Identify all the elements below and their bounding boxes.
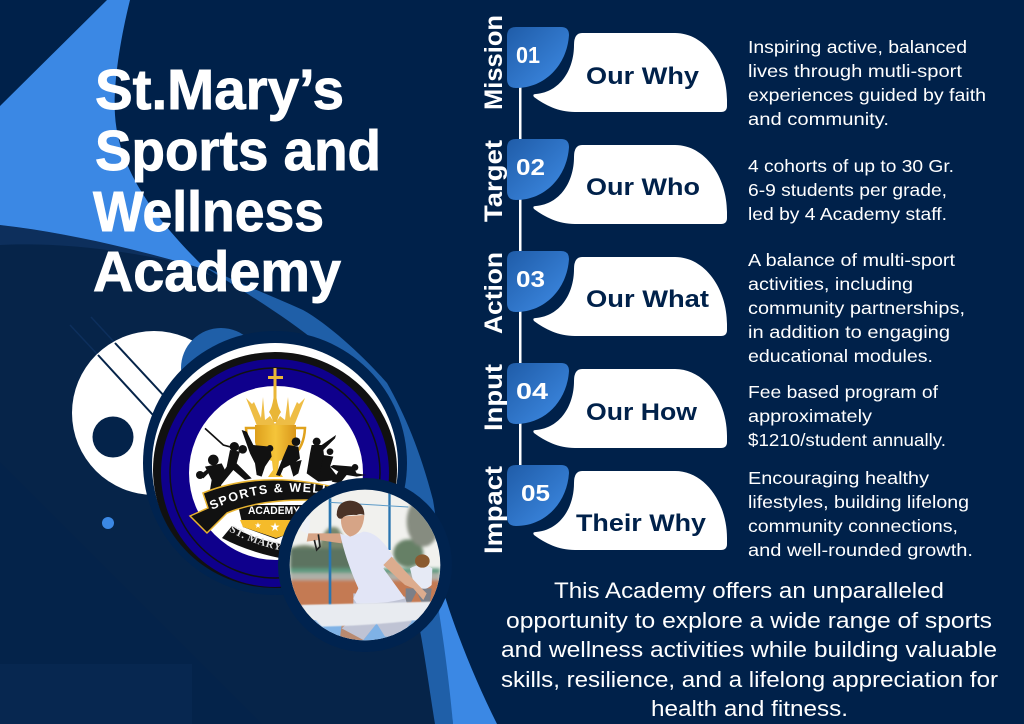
background player xyxy=(406,554,432,602)
badge 04 xyxy=(507,363,569,424)
description 05 xyxy=(748,468,973,560)
title: St.Mary’s xyxy=(95,58,344,122)
icon: white ball with lines xyxy=(70,317,236,495)
photo: tennis player xyxy=(278,478,446,640)
banner ribbon: ★ xyxy=(254,521,262,530)
card: Our How: Our How xyxy=(586,399,698,426)
icon: gold trophy with crown and cross xyxy=(246,368,305,477)
label: Impact: Impact xyxy=(480,465,508,554)
card: Our Who: Our Who xyxy=(586,174,700,201)
description 01: lives through mutli-sport xyxy=(748,61,962,81)
description 01 xyxy=(748,37,986,129)
card: Our What xyxy=(533,257,727,336)
step 04: Input xyxy=(480,363,946,450)
step 05: Impact xyxy=(480,465,973,560)
description 05: lifestyles, building lifelong xyxy=(748,492,969,512)
closing paragraph: and wellness activities while building valuable xyxy=(501,637,997,662)
closing paragraph: This Academy offers an unparalleled xyxy=(554,578,944,603)
closing paragraph xyxy=(501,578,998,721)
badge 01: 01 xyxy=(516,42,540,68)
label: Action: Action xyxy=(480,252,508,334)
icon: athlete silhouettes xyxy=(196,428,367,490)
description 04: Fee based program of xyxy=(748,382,938,402)
description 05: and well-rounded growth. xyxy=(748,540,973,560)
card: Our Why: Our Why xyxy=(586,63,699,90)
badge 05: 05 xyxy=(521,480,550,506)
badge 04: 04 xyxy=(516,378,548,404)
title: Academy xyxy=(93,240,341,304)
card: Our What: Our What xyxy=(586,286,709,313)
banner ribbon: ★ xyxy=(270,520,280,534)
card: Their Why: Their Why xyxy=(576,510,706,537)
description 03: in addition to engaging xyxy=(748,322,950,342)
badge 02 xyxy=(507,139,569,200)
badge 05 xyxy=(507,465,569,526)
title: Wellness xyxy=(93,180,324,244)
card: Our How xyxy=(533,369,727,448)
card: Our Why xyxy=(533,33,727,112)
closing paragraph: skills, resilience, and a lifelong appreciation for xyxy=(501,667,998,692)
banner ribbon xyxy=(188,479,330,558)
description 01: Inspiring active, balanced xyxy=(748,37,967,57)
net xyxy=(301,602,433,627)
main player xyxy=(300,501,427,640)
description 02: 4 cohorts of up to 30 Gr. xyxy=(748,156,954,176)
label: Input: Input xyxy=(480,363,508,431)
card: Our Who xyxy=(533,145,727,224)
photo backdrop xyxy=(290,490,440,640)
badge 01 xyxy=(507,27,569,88)
closing paragraph: health and fitness. xyxy=(651,696,848,721)
decorative blue blob behind logo xyxy=(181,328,261,408)
description 02: led by 4 Academy staff. xyxy=(748,204,947,224)
label: Mission: Mission xyxy=(480,15,508,110)
logo badge xyxy=(143,334,407,588)
step 03: Action xyxy=(480,250,965,366)
description 02: 6-9 students per grade, xyxy=(748,180,947,200)
decorative blue dot xyxy=(102,517,114,529)
banner ribbon: ACADEMY xyxy=(248,505,301,517)
decorative dark blue curved band xyxy=(200,264,453,724)
badge 03 xyxy=(507,251,569,312)
description 03: community partnerships, xyxy=(748,298,965,318)
title xyxy=(93,58,381,304)
description 04: approximately xyxy=(748,406,872,426)
description 03: educational modules. xyxy=(748,346,933,366)
description 05: community connections, xyxy=(748,516,958,536)
badge 02: 02 xyxy=(516,154,545,180)
description 04 xyxy=(748,382,946,450)
title: Sports and xyxy=(95,119,381,183)
card: Their Why xyxy=(533,471,727,550)
timeline connector line xyxy=(519,80,522,480)
description 03: A balance of multi-sport xyxy=(748,250,955,270)
step 01: Mission xyxy=(480,15,986,129)
description 03 xyxy=(748,250,965,366)
description 04: $1210/student annually. xyxy=(748,430,946,450)
description 02 xyxy=(748,156,954,224)
closing paragraph: opportunity to explore a wide range of sports xyxy=(506,608,992,633)
description 01: and community. xyxy=(748,109,889,129)
badge 03: 03 xyxy=(516,266,545,292)
description 03: activities, including xyxy=(748,274,913,294)
label: Target: Target xyxy=(480,139,508,222)
banner ribbon: ST. MARY'S xyxy=(230,526,281,550)
description 05: Encouraging healthy xyxy=(748,468,929,488)
description 01: experiences guided by faith xyxy=(748,85,986,105)
step 02: Target xyxy=(480,139,954,224)
decorative light blue curved band xyxy=(439,590,497,724)
decorative blue sail shape xyxy=(0,0,207,270)
